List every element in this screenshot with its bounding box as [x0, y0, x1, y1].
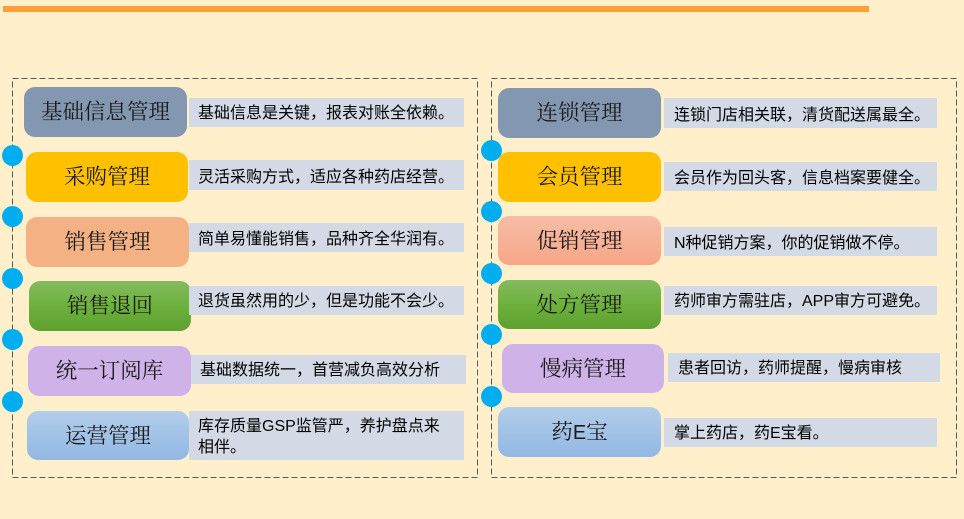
left timeline dot 4	[2, 329, 23, 350]
label: 采购管理: 采购管理	[64, 165, 150, 189]
description: 销售退回	[189, 286, 464, 315]
description: 慢病管理: 患者回访，药师提醒，慢病审核	[678, 360, 902, 377]
description: 处方管理: 药师审方需驻店，APP审方可避免。	[674, 293, 930, 310]
description: 促销管理: N种促销方案，你的促销做不停。	[674, 235, 910, 252]
top orange bar	[3, 6, 869, 12]
label: 基础信息管理	[24, 87, 187, 137]
right timeline dot 4	[481, 324, 502, 345]
label: 处方管理: 处方管理	[536, 292, 622, 316]
description: 销售退回: 退货虽然用的少，但是功能不会少。	[198, 293, 454, 310]
description: 销售管理: 简单易懂能销售，品种齐全华润有。	[198, 231, 454, 248]
description: 促销管理	[664, 227, 937, 256]
label: 销售管理: 销售管理	[64, 230, 150, 254]
label: 采购管理	[26, 152, 188, 202]
description: 处方管理	[664, 286, 937, 315]
description: 会员管理	[664, 162, 937, 191]
description: 运营管理	[189, 411, 464, 460]
left timeline dot 5	[2, 391, 23, 412]
description: 运营管理: 库存质量GSP监管严，养护盘点来相伴。	[198, 418, 440, 456]
description: 统一订阅库: 基础数据统一，首营减负高效分析	[200, 362, 440, 379]
label: 销售退回: 销售退回	[67, 294, 153, 318]
label: 运营管理: 运营管理	[65, 424, 151, 448]
description: 统一订阅库	[191, 355, 466, 384]
label: 处方管理	[498, 280, 661, 329]
label: 会员管理	[498, 152, 661, 202]
label: 基础信息管理: 基础信息管理	[41, 100, 170, 124]
label: 会员管理: 会员管理	[536, 165, 622, 189]
label: 连锁管理: 连锁管理	[536, 101, 622, 125]
right timeline dot 3	[481, 263, 502, 284]
label: 连锁管理	[498, 88, 661, 138]
label: 统一订阅库	[28, 346, 191, 396]
panel: left dashed frame	[12, 78, 478, 478]
left timeline dot 2	[2, 206, 23, 227]
right timeline dot 5	[481, 386, 502, 407]
label: 药E宝: 药E宝	[551, 420, 608, 444]
label: 促销管理: 促销管理	[536, 228, 622, 252]
label: 药E宝	[498, 407, 661, 457]
description: 药E宝	[664, 418, 937, 447]
description: 采购管理	[189, 160, 464, 190]
label: 销售管理	[26, 217, 189, 267]
right timeline dot 1	[481, 140, 502, 161]
description: 连锁管理: 连锁门店相关联，清货配送属最全。	[674, 106, 930, 124]
description: 慢病管理	[668, 353, 940, 382]
label: 慢病管理: 慢病管理	[540, 356, 626, 380]
description: 销售管理	[189, 223, 464, 252]
description: 基础信息管理	[189, 98, 464, 127]
description: 采购管理: 灵活采购方式，适应各种药店经营。	[198, 168, 454, 186]
panel: right dashed frame	[491, 78, 957, 478]
description: 基础信息管理: 基础信息是关键，报表对账全依赖。	[198, 105, 454, 122]
description: 药E宝: 掌上药店，药E宝看。	[674, 425, 829, 442]
right timeline dot 2	[481, 201, 502, 222]
description: 连锁管理	[664, 98, 937, 128]
label: 运营管理	[27, 411, 189, 460]
label: 统一订阅库: 统一订阅库	[56, 359, 163, 383]
label: 销售退回	[29, 281, 191, 331]
label: 慢病管理	[502, 344, 664, 393]
description: 会员管理: 会员作为回头客，信息档案要健全。	[674, 170, 930, 187]
left timeline dot 3	[2, 268, 23, 289]
left timeline dot 1	[2, 145, 23, 166]
label: 促销管理	[498, 216, 661, 265]
